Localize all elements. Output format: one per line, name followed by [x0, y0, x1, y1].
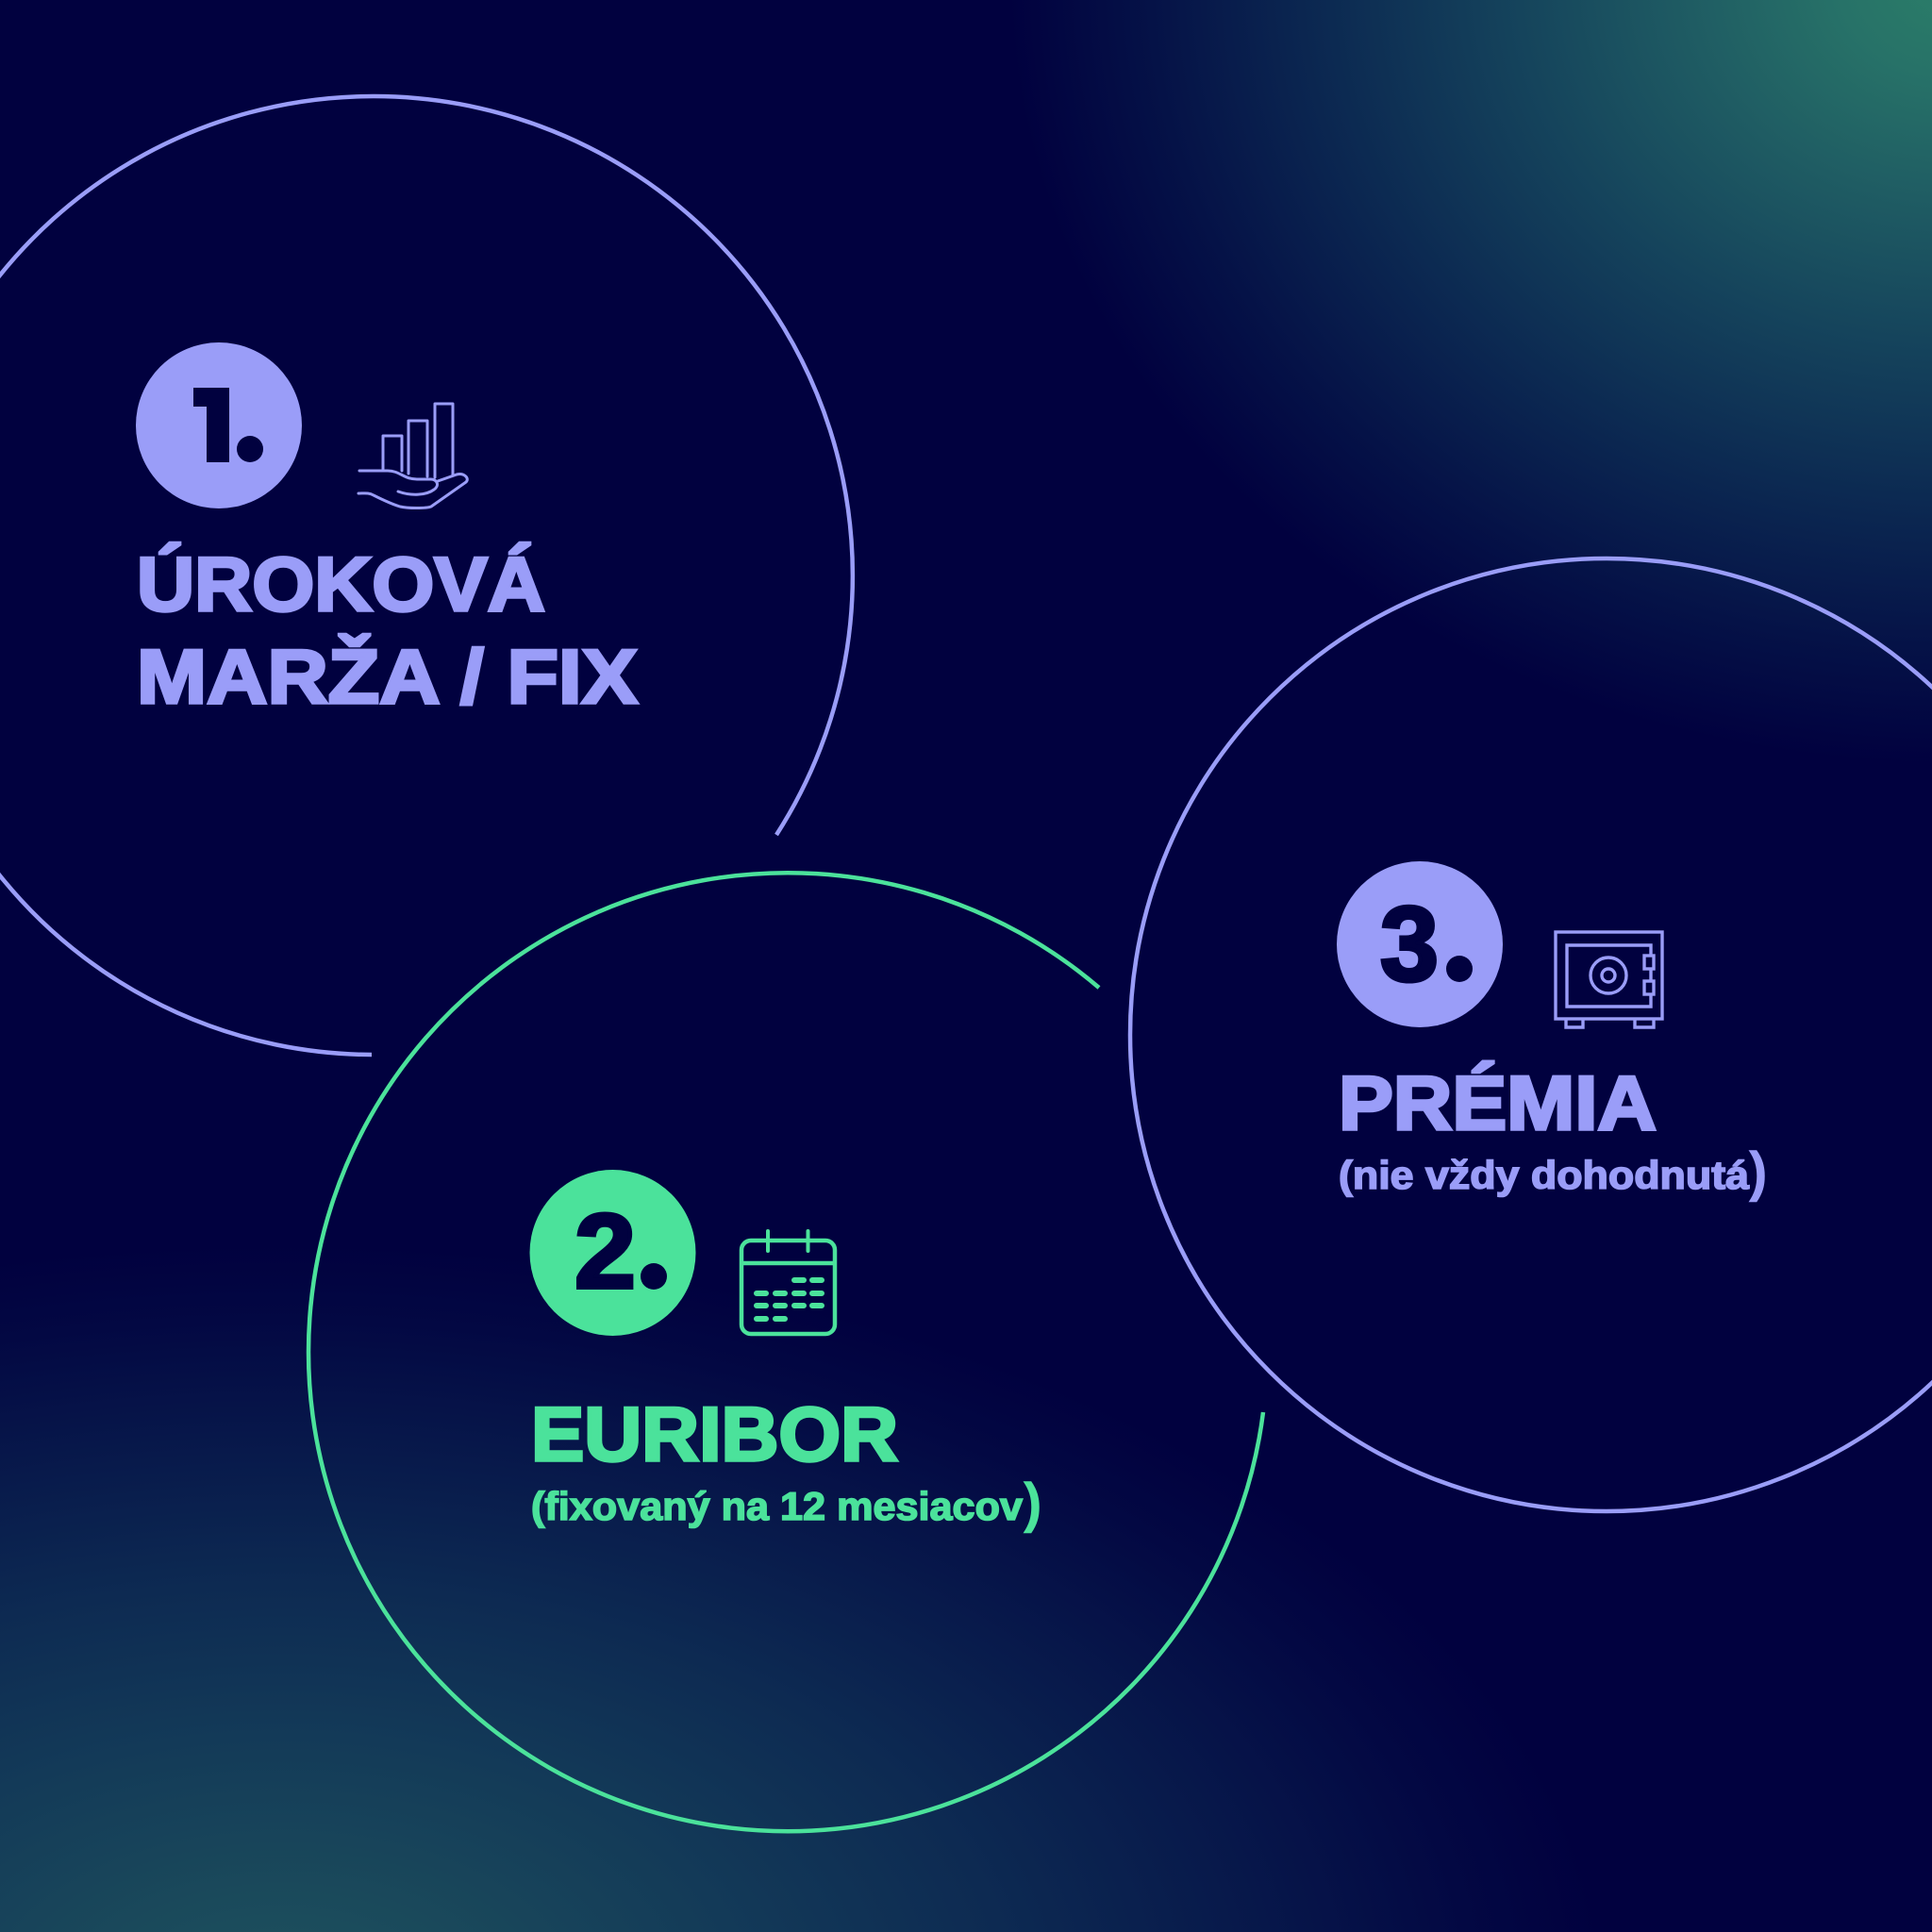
number badge 2: 2	[575, 1192, 636, 1310]
number badge 1: .	[243, 418, 257, 471]
number badge 3: .	[1453, 938, 1466, 991]
ring arc 1	[0, 96, 853, 1055]
number badge 3: 3	[1380, 885, 1439, 1003]
heading: úroková marža / fix: ÚROKOVÁ	[137, 541, 545, 627]
subheading: fixovaný na 12 mesiacov: )	[1024, 1473, 1041, 1534]
icon: hand holding bar chart	[358, 404, 467, 508]
heading: úroková marža / fix: MARŽA / FIX	[137, 633, 638, 720]
ring 3	[1130, 558, 1932, 1511]
icon: safe	[1556, 932, 1662, 1027]
number badge 1	[136, 342, 302, 508]
panel: 1 úroková marža	[0, 96, 853, 1055]
number badge 2	[530, 1170, 696, 1336]
panel: 3 prémia	[1130, 558, 1932, 1511]
heading: prémia: PRÉMIA	[1339, 1060, 1657, 1146]
ring arc 2	[308, 873, 1263, 1831]
panel: 2 euribor	[308, 873, 1263, 1831]
subheading: nie vždy dohodnutá: (nie vždy dohodnutá	[1339, 1153, 1750, 1197]
heading: euribor: EURIBOR	[531, 1392, 898, 1477]
heading: úroková marža / fix	[137, 541, 638, 720]
number badge 2: .	[647, 1245, 660, 1298]
icon: calendar	[741, 1231, 835, 1334]
subheading: fixovaný na 12 mesiacov: (fixovaný na 12 mesiacov	[531, 1484, 1024, 1528]
number badge 3	[1337, 861, 1503, 1027]
number badge 1: 1	[189, 365, 247, 483]
subheading: nie vždy dohodnutá: )	[1749, 1141, 1767, 1203]
